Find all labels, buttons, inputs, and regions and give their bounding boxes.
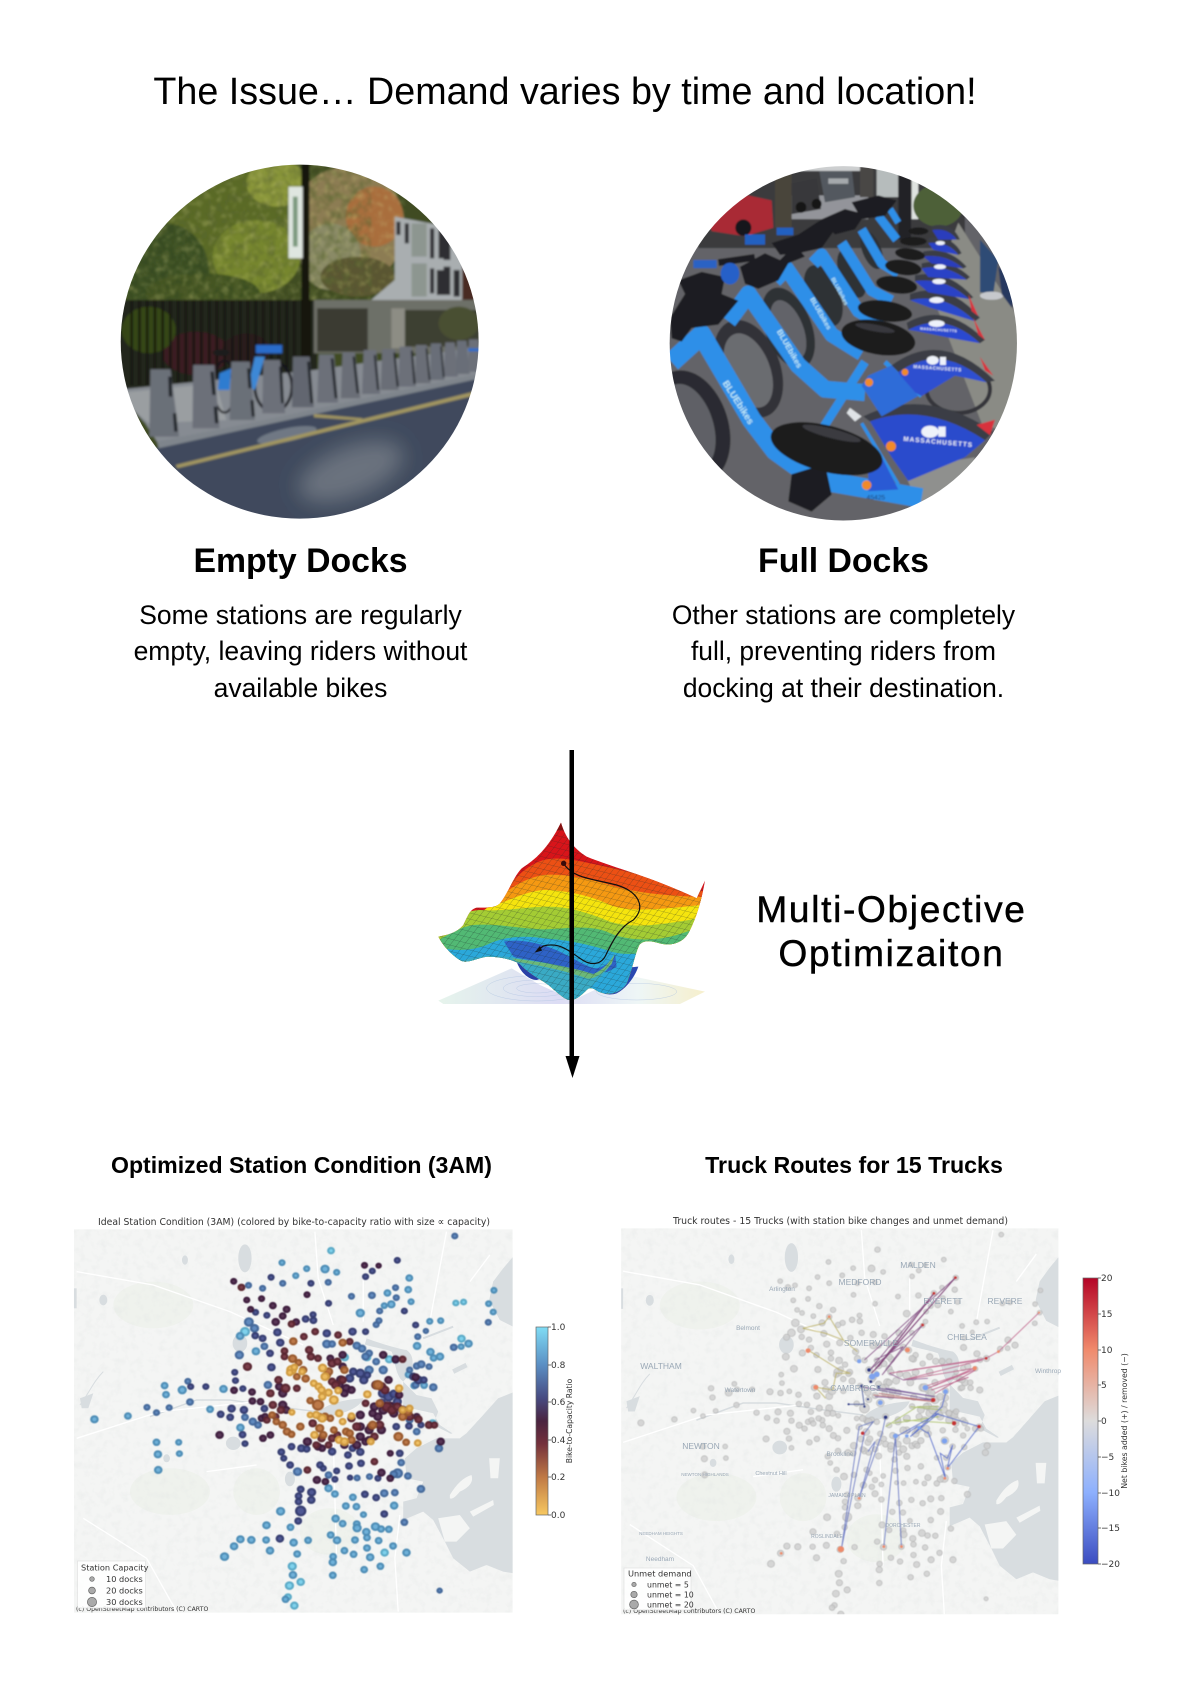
map place labels: Brookline [826,1451,854,1458]
map place labels: EVERETT [923,1296,963,1306]
colorbar: net bikes added or removed: Net bikes added (+) / removed (−) [1120,1353,1129,1489]
photo: full docks with blue bikes: MASSACHUSETTS [920,327,957,333]
map place labels: Watertown [725,1387,756,1394]
map place labels: NEWTON HIGHLANDS [681,1472,729,1477]
photo: full docks with blue bikes [670,166,1017,520]
photo: full docks with blue bikes: BLUEbikes [721,378,757,426]
colorbar: bike-to-capacity ratio: 0.8 [551,1361,566,1371]
text: empty docks description: empty, leaving riders without [134,636,468,666]
panel: empty docks text [134,542,468,703]
photo: empty docks station [115,160,489,530]
colorbar: net bikes added or removed [1083,1274,1129,1570]
map place labels: CAMBRIDGE [830,1383,882,1393]
chart: truck routes map [596,1216,1129,1629]
heading: optimized station condition: Optimized Station Condition (3AM) [111,1152,492,1178]
colorbar: net bikes added or removed: −20 [1101,1560,1120,1570]
map place labels: Belmont [736,1325,760,1332]
attribution: (c) OpenStreetMap contributors (C) CARTO [76,1606,208,1613]
colorbar: net bikes added or removed: −15 [1101,1524,1120,1534]
heading: empty docks: Empty Docks [193,542,408,580]
text: full docks description: docking at their destination. [683,673,1004,703]
arrow: downward flow [566,750,580,1078]
map place labels: Arlington [769,1286,795,1293]
legend: station capacity [78,1561,149,1608]
attribution: (c) OpenStreetMap contributors (C) CARTO [623,1608,755,1615]
map place labels: DORCHESTER [885,1523,921,1529]
heading: truck routes: Truck Routes for 15 Trucks [705,1152,1003,1178]
map place labels: MEDFORD [839,1277,881,1287]
chart title: Truck routes - 15 Trucks (with station bike changes and unmet demand) [672,1216,1008,1227]
map place labels: Needham [646,1556,674,1563]
legend: unmet demand: unmet = 5 [647,1580,689,1590]
text: multi-objective optimization label: Optimizaiton [778,933,1005,974]
map place labels: MALDEN [900,1260,936,1270]
photo: full docks with blue bikes: MASSACHUSETTS [903,436,973,449]
map place labels: Chestnut Hill [755,1471,787,1477]
legend: unmet demand: unmet = 10 [647,1590,694,1600]
panel: full docks text [672,542,1016,703]
text: empty docks description: available bikes [214,673,387,703]
map place labels: REVERE [988,1296,1023,1306]
colorbar: bike-to-capacity ratio: 0.4 [551,1436,566,1446]
legend: unmet demand [624,1568,694,1610]
colorbar: bike-to-capacity ratio: 0.2 [551,1473,565,1483]
colorbar: net bikes added or removed: −10 [1101,1489,1120,1499]
legend: unmet demand: unmet = 20 [647,1600,694,1610]
text: multi-objective optimization label: Multi-Objective [756,889,1027,930]
colorbar: bike-to-capacity ratio [536,1323,574,1521]
photo: full docks with blue bikes: 45425 [867,494,885,501]
map place labels: ROSLINDALE [811,1534,843,1540]
legend: station capacity: 20 docks [106,1586,143,1596]
colorbar: net bikes added or removed: 0 [1101,1417,1107,1427]
photo: full docks with blue bikes: MASSACHUSETTS [913,364,962,373]
map place labels: JAMAICA PLAIN [828,1493,866,1499]
photo: full docks with blue bikes: BLUEbikes [775,328,804,370]
map place labels: NEWTON [682,1441,720,1451]
chart: station condition scatter map [50,1217,574,1620]
colorbar: net bikes added or removed: 10 [1101,1346,1113,1356]
map place labels: Winthrop [1035,1368,1061,1375]
colorbar: bike-to-capacity ratio: Bike-to-Capacity Ratio [565,1378,574,1463]
text: empty docks description: Some stations are regularly [139,600,463,630]
legend: station capacity: 30 docks [106,1597,143,1607]
colorbar: net bikes added or removed: −5 [1101,1453,1114,1463]
heading: full docks: Full Docks [758,542,929,580]
colorbar: bike-to-capacity ratio: 0.0 [551,1511,566,1521]
title: The Issue… Demand varies by time and location! [153,70,977,112]
chart: 3D optimization surface [438,822,705,1004]
colorbar: net bikes added or removed: 15 [1101,1310,1112,1320]
text: full docks description: full, preventing riders from [691,636,996,666]
map place labels: WALTHAM [640,1361,682,1371]
photo: full docks with blue bikes: BLUEbikes [808,297,832,331]
map with station dots [74,1230,513,1612]
photo: full docks with blue bikes: BLUEbikes [829,277,849,307]
map place labels: NEEDHAM HEIGHTS [639,1531,683,1536]
map place labels [639,1260,1061,1563]
chart title: Ideal Station Condition (3AM) (colored by bike-to-capacity ratio with size ∝ capacity) [98,1217,490,1228]
text: full docks description: Other stations are completely [672,600,1016,630]
colorbar: bike-to-capacity ratio: 0.6 [551,1398,566,1408]
colorbar: net bikes added or removed: 5 [1101,1381,1107,1391]
map with routes [621,1228,1058,1614]
map place labels: SOMERVILLE [844,1338,898,1348]
legend: station capacity: Station Capacity [81,1562,149,1572]
map place labels: CHELSEA [947,1332,987,1342]
colorbar: net bikes added or removed: 20 [1101,1274,1113,1284]
colorbar: bike-to-capacity ratio: 1.0 [551,1323,566,1333]
legend: unmet demand: Unmet demand [628,1568,692,1578]
legend: station capacity: 10 docks [106,1574,143,1584]
